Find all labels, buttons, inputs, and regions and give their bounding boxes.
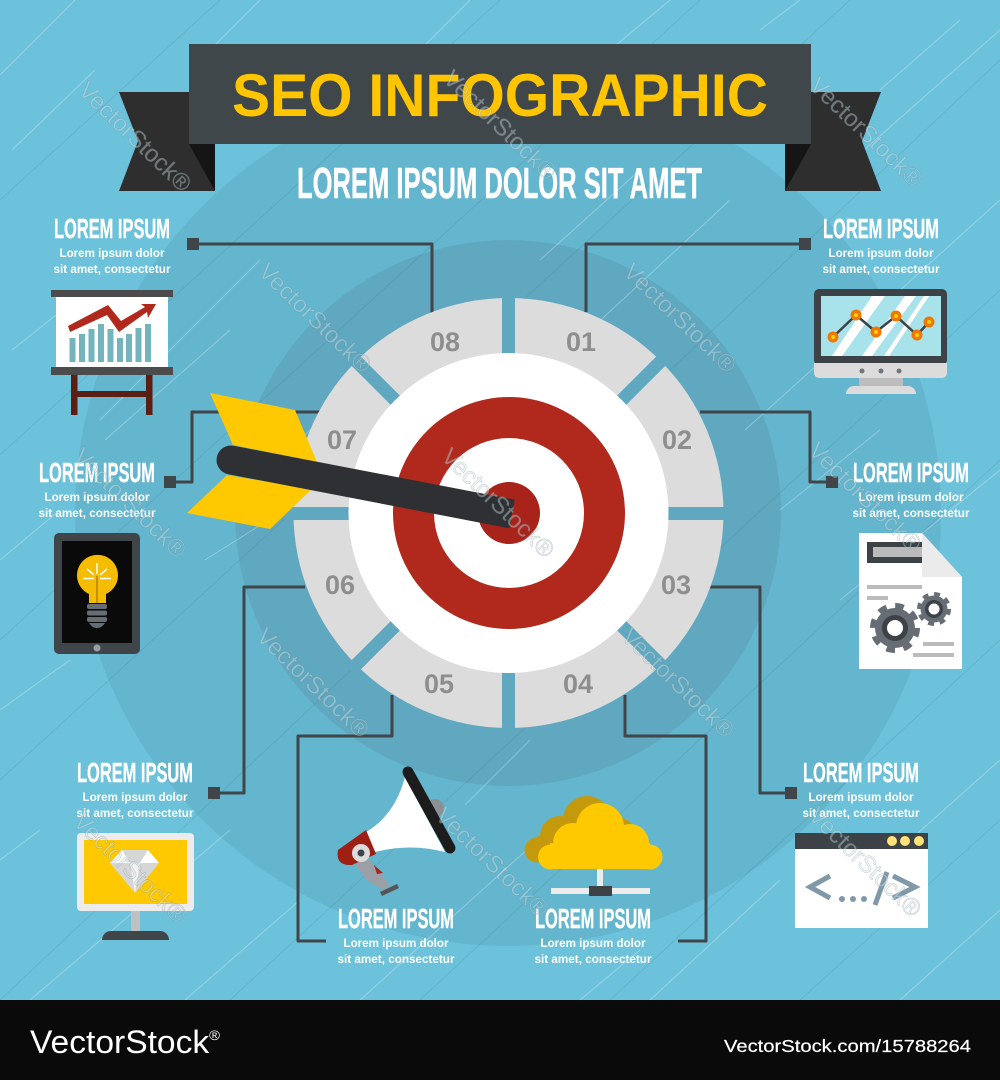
ribbon banner bbox=[119, 44, 881, 191]
segment numbers: 03 bbox=[661, 570, 691, 600]
segment numbers: 05 bbox=[424, 669, 454, 699]
label 2: top right: Lorem ipsum dolor bbox=[828, 246, 934, 260]
watermarks: VectorStock® bbox=[438, 65, 562, 186]
watermarks bbox=[68, 65, 928, 929]
label 6: lower right bbox=[802, 757, 920, 820]
label 3: middle left bbox=[38, 457, 156, 520]
watermarks: VectorStock® bbox=[803, 437, 927, 558]
icon: tablet with light bulb bbox=[54, 533, 140, 654]
watermarks: VectorStock® bbox=[430, 802, 554, 923]
label 8: bottom centre right: LOREM IPSUM bbox=[535, 903, 651, 934]
icon: presentation board bbox=[51, 290, 173, 415]
subtitle: LOREM IPSUM DOLOR SIT AMET bbox=[297, 159, 702, 208]
segment numbers: 06 bbox=[325, 570, 355, 600]
target wheel bbox=[285, 290, 732, 736]
label 3: middle left: LOREM IPSUM bbox=[39, 457, 155, 488]
label 7: bottom centre left: Lorem ipsum dolor bbox=[344, 936, 449, 950]
footer bar: VectorStock.com/15788264 bbox=[724, 1036, 971, 1056]
watermarks: VectorStock® bbox=[68, 443, 192, 564]
label 4: middle right: sit amet, consectetur bbox=[852, 506, 970, 520]
label 8: bottom centre right bbox=[534, 903, 652, 966]
label 1: top left bbox=[54, 213, 171, 276]
label 1: top left: Lorem ipsum dolor bbox=[60, 246, 165, 260]
label 5: lower left: Lorem ipsum dolor bbox=[82, 790, 188, 804]
watermarks: VectorStock® bbox=[803, 802, 927, 923]
label 5: lower left: LOREM IPSUM bbox=[77, 757, 193, 788]
segment numbers: 07 bbox=[327, 425, 357, 455]
icon: desktop with diamond bbox=[77, 833, 194, 940]
label 8: bottom centre right: sit amet, consectetur bbox=[534, 952, 652, 966]
label 7: bottom centre left: LOREM IPSUM bbox=[338, 903, 454, 934]
label 8: bottom centre right: Lorem ipsum dolor bbox=[540, 936, 646, 950]
icon: cloud network bbox=[524, 796, 662, 896]
footer bar: VectorStock bbox=[30, 1024, 201, 1060]
label 5: lower left bbox=[76, 757, 194, 820]
watermarks: VectorStock® bbox=[251, 623, 375, 744]
watermarks: VectorStock® bbox=[616, 623, 740, 744]
label 4: middle right: Lorem ipsum dolor bbox=[858, 490, 964, 504]
segment numbers bbox=[325, 327, 692, 699]
label 6: lower right: LOREM IPSUM bbox=[803, 757, 919, 788]
label 3: middle left: Lorem ipsum dolor bbox=[44, 490, 150, 504]
segment numbers: 01 bbox=[566, 327, 596, 357]
label 7: bottom centre left: sit amet, consectetur bbox=[338, 952, 455, 966]
icon: document with gears bbox=[859, 533, 962, 669]
watermarks: VectorStock® bbox=[618, 258, 742, 379]
watermarks: VectorStock® bbox=[253, 258, 377, 379]
segment numbers: 08 bbox=[430, 327, 460, 357]
label 2: top right: sit amet, consectetur bbox=[822, 262, 940, 276]
watermarks: VectorStock® bbox=[804, 72, 928, 193]
watermarks: VectorStock® bbox=[73, 77, 197, 198]
icon: megaphone bbox=[338, 772, 450, 894]
label 1: top left: LOREM IPSUM bbox=[54, 213, 170, 244]
icon: monitor with line chart bbox=[814, 289, 947, 394]
title: SEO INFOGRAPHIC bbox=[232, 62, 768, 129]
label 6: lower right: Lorem ipsum dolor bbox=[808, 790, 914, 804]
label 3: middle left: sit amet, consectetur bbox=[38, 506, 156, 520]
label 4: middle right bbox=[852, 457, 970, 520]
watermarks: VectorStock® bbox=[68, 808, 192, 929]
label 5: lower left: sit amet, consectetur bbox=[76, 806, 194, 820]
dart arrow bbox=[187, 393, 512, 529]
icon: code window bbox=[795, 833, 928, 928]
label 2: top right bbox=[822, 213, 940, 276]
footer bar bbox=[0, 1000, 1000, 1080]
segment numbers: 04 bbox=[563, 669, 593, 699]
connector lines bbox=[164, 238, 838, 941]
footer bar: ® bbox=[209, 1027, 221, 1043]
label 7: bottom centre left bbox=[338, 903, 455, 966]
watermarks: VectorStock® bbox=[436, 443, 560, 564]
label 1: top left: sit amet, consectetur bbox=[54, 262, 171, 276]
segment numbers: 02 bbox=[662, 425, 692, 455]
label 6: lower right: sit amet, consectetur bbox=[802, 806, 920, 820]
